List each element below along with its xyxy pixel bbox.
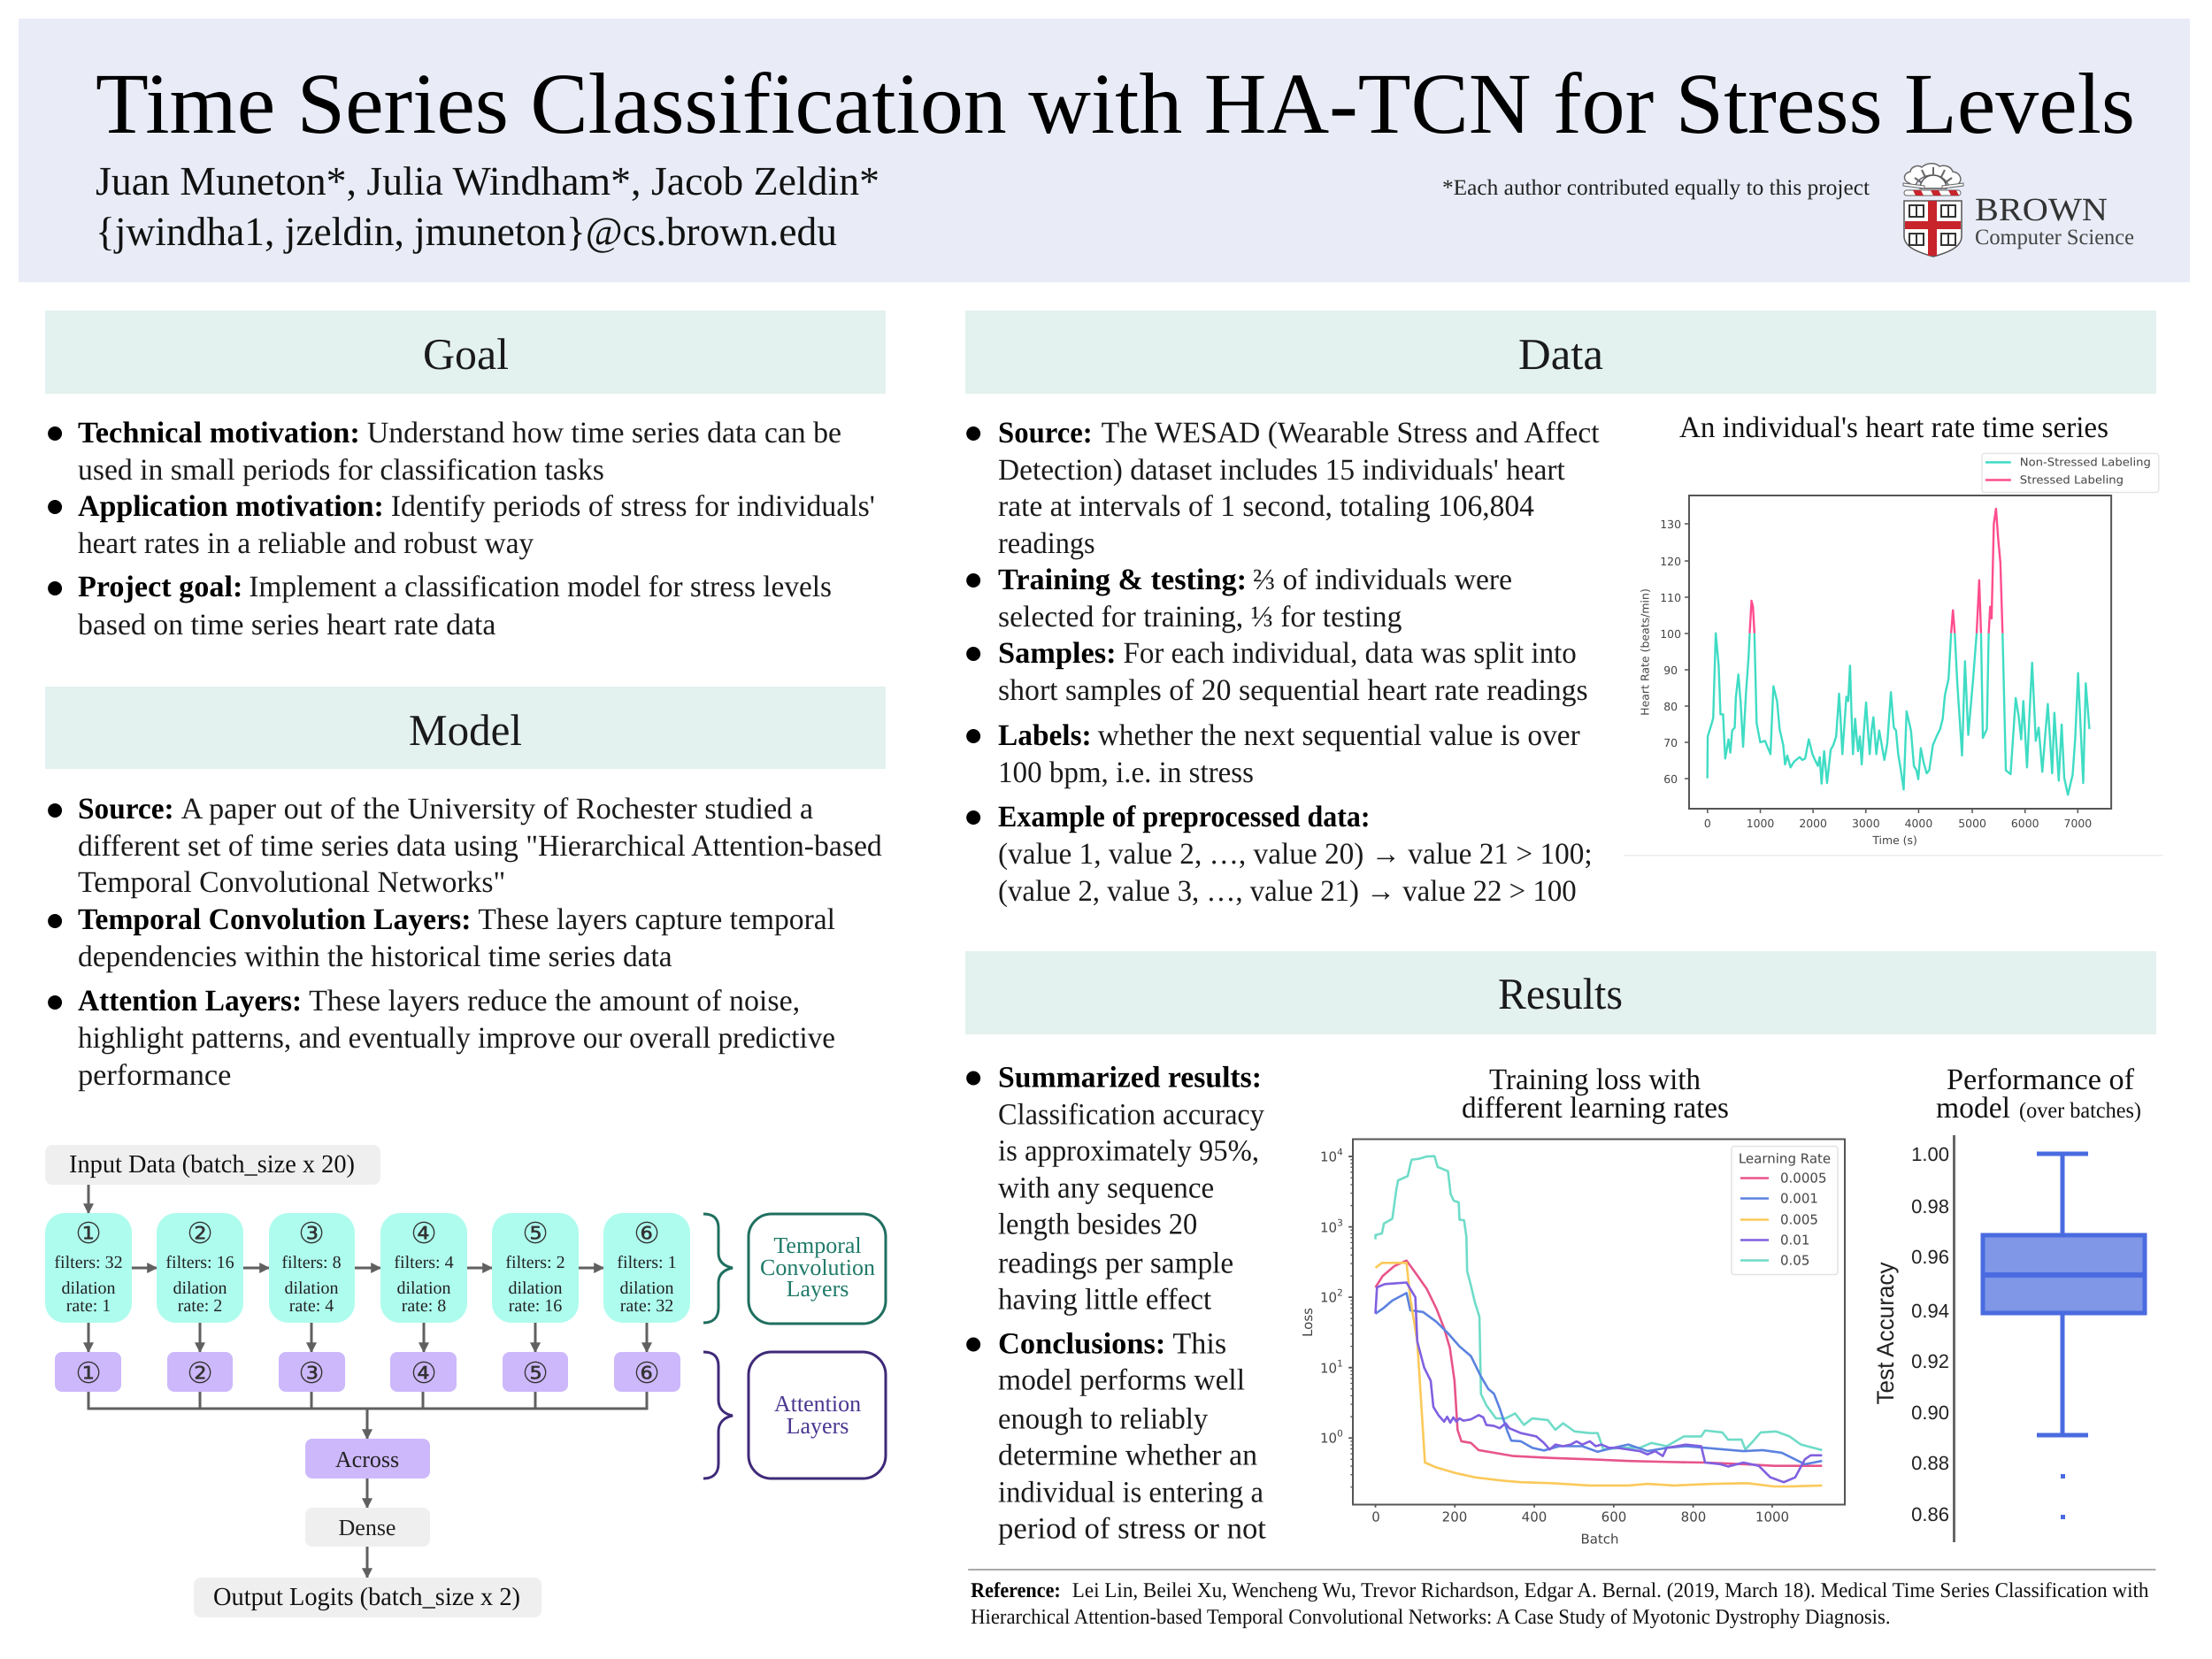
results bullet list: Conclusions: <box>998 1327 1165 1361</box>
training loss axis labels: 2 <box>1337 1288 1343 1299</box>
temporal convolution layer blocks: rate: 4 <box>289 1296 334 1316</box>
box plot tick labels: 0.86 <box>1911 1503 1949 1525</box>
attention layer blocks: ④ <box>411 1358 437 1390</box>
label: temporal convolution layers: Convolution <box>760 1255 875 1280</box>
heart rate legend <box>1982 453 2159 492</box>
results bullet list: readings per sample <box>998 1248 1233 1279</box>
goal bullet list: Identify periods of stress for individuals' <box>391 490 875 523</box>
temporal convolution layer blocks: filters: 16 <box>165 1253 234 1272</box>
dense block <box>305 1508 430 1547</box>
heading: data <box>965 311 2156 394</box>
temporal convolution layer blocks: ⑤ <box>522 1218 549 1250</box>
temporal convolution layer blocks: filters: 32 <box>54 1253 123 1272</box>
brace: temporal convolution layers <box>703 1214 733 1323</box>
reference citation: Lei Lin, Beilei Xu, Wencheng Wu, Trevor Richardson, Edgar A. Bernal. (2019, March 18). Medical Time Series Classification with <box>1072 1579 2148 1602</box>
output logits box <box>194 1578 541 1617</box>
box plot tick labels: 0.96 <box>1911 1246 1949 1268</box>
training loss axis labels: 0 <box>1337 1428 1343 1439</box>
data bullet list: For each individual, data was split into <box>1124 637 1577 670</box>
training loss axis labels: 10 <box>1320 1219 1337 1235</box>
temporal convolution layer blocks: filters: 1 <box>617 1253 677 1272</box>
results bullet list: with any sequence <box>998 1171 1214 1205</box>
heart rate axis labels: 1000 <box>1747 817 1774 830</box>
heart rate axis labels: 90 <box>1663 664 1678 677</box>
logo: Brown Computer Science <box>1903 164 2134 257</box>
model architecture diagram <box>45 1145 886 1617</box>
results bullet list: determine whether an <box>998 1439 1257 1472</box>
label: attention layers <box>749 1352 886 1479</box>
temporal convolution layer blocks: ① <box>75 1218 102 1250</box>
heart rate axis labels: Time (s) <box>1871 833 1917 847</box>
attention layer blocks: ① <box>75 1358 102 1390</box>
results bullet list: model performs well <box>998 1364 1245 1396</box>
chart title: training loss: different learning rates <box>1462 1092 1729 1125</box>
chart title: training loss <box>1462 1064 1729 1125</box>
model bullet list: A paper out of the University of Rochester studied a <box>181 793 813 826</box>
attention layer blocks: ② <box>187 1358 213 1390</box>
author emails: {jwindha1, jzeldin, jmuneton}@cs.brown.edu <box>96 209 837 254</box>
box plot tick labels: 1.00 <box>1911 1143 1949 1165</box>
temporal convolution layer blocks: ② <box>187 1218 213 1250</box>
goal bullet list: Technical motivation: <box>78 417 360 449</box>
results bullet list <box>966 1062 1267 1545</box>
chart title: performance of model: model <box>1936 1092 2010 1125</box>
temporal convolution layer blocks: filters: 2 <box>505 1253 565 1272</box>
model bullet list: Temporal Convolution Layers: <box>78 903 471 936</box>
heart rate axis labels: 130 <box>1660 518 1681 531</box>
chart title: heart rate: An individual's heart rate time series <box>1679 411 2108 444</box>
results bullet list: period of stress or not <box>998 1513 1267 1545</box>
temporal convolution layer blocks: dilation <box>284 1279 339 1298</box>
goal bullet list: Implement a classification model for stress levels <box>249 571 832 603</box>
goal bullet list: Understand how time series data can be <box>367 417 841 449</box>
temporal convolution layer blocks <box>45 1213 690 1323</box>
model bullet list <box>48 793 882 1092</box>
data bullet list: rate at intervals of 1 second, totaling 106,804 <box>998 490 1534 523</box>
temporal convolution layer blocks: dilation <box>173 1279 227 1298</box>
chart title: training loss: Training loss with <box>1489 1064 1701 1096</box>
box plot axis title: Test Accuracy <box>1872 1262 1899 1405</box>
title: Time Series Classification with HA-TCN for Stress Levels <box>96 57 2135 152</box>
label: temporal convolution layers: Layers <box>787 1276 849 1302</box>
heart rate axis labels: Heart Rate (beats/min) <box>1638 588 1651 716</box>
box plot: test accuracy <box>1872 1135 2147 1542</box>
heading: model: Model <box>409 705 522 755</box>
logo: Brown Computer Science: Computer Science <box>1975 226 2134 250</box>
training loss legend: 0.01 <box>1780 1232 1809 1248</box>
training loss axis labels: 10 <box>1320 1148 1337 1164</box>
data bullet list: Samples: <box>998 637 1117 670</box>
box plot tick labels: 0.98 <box>1911 1195 1949 1217</box>
temporal convolution layer blocks: ⑥ <box>634 1218 660 1250</box>
model bullet list: performance <box>78 1059 231 1092</box>
temporal convolution layer blocks: ④ <box>411 1218 437 1250</box>
chart title: performance of model <box>1936 1064 2141 1125</box>
heart rate axis labels: 4000 <box>1905 817 1932 830</box>
results bullet list: is approximately 95%, <box>998 1134 1259 1168</box>
line chart: heart rate time series <box>1638 453 2159 847</box>
heading: results <box>965 951 2156 1034</box>
data bullet list: Detection) dataset includes 15 individuals' heart <box>998 454 1565 487</box>
results bullet list: This <box>1172 1327 1226 1361</box>
goal bullet list <box>48 417 875 641</box>
brace: attention layers <box>703 1352 733 1479</box>
box plot tick labels <box>1911 1143 1949 1525</box>
results bullet list: enough to reliably <box>998 1403 1208 1435</box>
heart rate axis labels: 100 <box>1660 627 1681 641</box>
reference citation: Hierarchical Attention-based Temporal Convolutional Networks: A Case Study of Myotonic Dystrophy Diagnosis. <box>971 1606 1890 1629</box>
chart title: performance of model: (over batches) <box>2019 1099 2141 1123</box>
data bullet list: selected for training, ⅓ for testing <box>998 601 1402 634</box>
model bullet list: These layers reduce the amount of noise, <box>309 985 800 1018</box>
input data box <box>45 1145 380 1185</box>
results bullet list: individual is entering a <box>998 1476 1263 1509</box>
reference citation <box>968 1569 2155 1629</box>
output logits box: Output Logits (batch_size x 2) <box>213 1583 520 1611</box>
goal bullet list: Project goal: <box>78 571 242 603</box>
temporal convolution layer blocks: rate: 16 <box>509 1296 562 1316</box>
training loss axis labels: 200 <box>1442 1509 1467 1525</box>
model bullet list: Source: <box>78 793 174 826</box>
panel: model <box>45 687 886 1092</box>
training loss legend <box>1732 1147 1838 1274</box>
heart rate legend: Stressed Labeling <box>2020 472 2124 487</box>
reference citation: Reference: <box>971 1579 1061 1602</box>
temporal convolution layer blocks: rate: 32 <box>620 1296 673 1316</box>
heart rate axis labels: 2000 <box>1799 817 1827 830</box>
box plot tick labels: 0.88 <box>1911 1452 1949 1474</box>
training loss axis labels: 10 <box>1320 1361 1337 1377</box>
training loss axis labels: Loss <box>1300 1308 1316 1337</box>
line chart: training loss <box>1300 1140 1845 1547</box>
temporal convolution layer blocks: ③ <box>298 1218 325 1250</box>
data bullet list <box>966 417 1600 908</box>
input data box: Input Data (batch_size x 20) <box>69 1150 355 1179</box>
heart rate axis labels: 80 <box>1663 700 1678 713</box>
heart rate legend: Non-Stressed Labeling <box>2020 455 2151 469</box>
data bullet list: ⅔ of individuals were <box>1253 564 1512 596</box>
data bullet list: readings <box>998 527 1095 560</box>
box plot tick labels: 0.90 <box>1911 1402 1949 1424</box>
training loss axis labels: 800 <box>1681 1509 1706 1525</box>
model bullet list: dependencies within the historical time series data <box>78 941 672 973</box>
heart rate axis labels: 70 <box>1663 736 1678 749</box>
authors: Juan Muneton*, Julia Windham*, Jacob Zeldin* <box>96 158 879 204</box>
data bullet list: The WESAD (Wearable Stress and Affect <box>1102 417 1600 449</box>
data bullet list: Source: <box>998 417 1093 449</box>
label: attention layers: Attention <box>774 1391 861 1417</box>
chart title: performance of model: Performance of <box>1947 1064 2135 1096</box>
header banner <box>19 19 2190 282</box>
training loss axis labels: 600 <box>1601 1509 1626 1525</box>
results bullet list: Summarized results: <box>998 1062 1262 1094</box>
heart rate axis labels <box>1638 518 2092 847</box>
panel: results <box>965 951 2156 1547</box>
goal bullet list: used in small periods for classification tasks <box>78 454 604 487</box>
model bullet list: These layers capture temporal <box>478 903 835 936</box>
logo: Brown Computer Science: BROWN <box>1975 192 2108 228</box>
training loss legend: 0.05 <box>1780 1253 1809 1269</box>
temporal convolution layer blocks: dilation <box>508 1279 563 1298</box>
heading: data: Data <box>1518 329 1603 379</box>
goal bullet list: based on time series heart rate data <box>78 609 495 641</box>
box plot tick labels: 0.92 <box>1911 1350 1949 1372</box>
heart rate axis labels: 5000 <box>1958 817 1986 830</box>
attention layer blocks: ③ <box>298 1358 325 1390</box>
heart rate axis labels: 3000 <box>1852 817 1880 830</box>
dense block: Dense <box>339 1515 396 1540</box>
panel: goal <box>45 311 886 641</box>
results bullet list: having little effect <box>998 1283 1212 1317</box>
heart rate axis labels: 7000 <box>2064 817 2092 830</box>
model bullet list: different set of time series data using "Hierarchical Attention-based <box>78 830 882 863</box>
panel: data <box>965 311 2163 908</box>
heart rate axis labels: 110 <box>1660 591 1681 604</box>
data bullet list: (value 1, value 2, …, value 20) → value 21 > 100; <box>998 838 1593 871</box>
heart rate axis labels: 0 <box>1704 817 1711 830</box>
label: attention layers: Layers <box>787 1413 849 1439</box>
training loss axis labels: Batch <box>1580 1531 1619 1547</box>
model bullet list: Temporal Convolutional Networks" <box>78 866 505 899</box>
heading: goal <box>45 311 886 394</box>
data bullet list: (value 2, value 3, …, value 21) → value 22 > 100 <box>998 875 1577 908</box>
training loss legend: Learning Rate <box>1739 1150 1831 1166</box>
temporal convolution layer blocks: rate: 8 <box>402 1296 446 1316</box>
training loss axis labels: 1000 <box>1755 1509 1789 1525</box>
attention layer blocks <box>55 1352 680 1392</box>
attention layer blocks: ⑤ <box>522 1358 549 1390</box>
heading: model <box>45 687 886 769</box>
temporal convolution layer blocks: filters: 4 <box>394 1253 454 1272</box>
data bullet list: Labels: <box>998 719 1092 752</box>
temporal convolution layer blocks: rate: 1 <box>66 1296 111 1316</box>
model bullet list: Attention Layers: <box>78 985 302 1018</box>
temporal convolution layer blocks: filters: 8 <box>281 1253 342 1272</box>
data bullet list: Training & testing: <box>998 564 1247 596</box>
training loss axis labels: 10 <box>1320 1430 1337 1446</box>
heart rate axis labels: 6000 <box>2011 817 2039 830</box>
training loss axis labels: 4 <box>1337 1147 1343 1157</box>
arrows between layers <box>88 1185 647 1578</box>
training loss axis labels: 1 <box>1337 1359 1343 1370</box>
goal bullet list: heart rates in a reliable and robust way <box>78 527 534 560</box>
training loss legend: 0.0005 <box>1780 1170 1826 1186</box>
across block: Across <box>335 1447 399 1472</box>
results bullet list: length besides 20 <box>998 1209 1197 1240</box>
heading: results: Results <box>1498 969 1623 1018</box>
equal contribution note: *Each author contributed equally to this project <box>1442 176 1870 200</box>
data bullet list: Example of preprocessed data: <box>998 801 1371 833</box>
training loss legend: 0.001 <box>1780 1191 1818 1207</box>
results bullet list: Classification accuracy <box>998 1099 1264 1131</box>
data bullet list: whether the next sequential value is over <box>1098 719 1580 752</box>
across block <box>305 1439 430 1479</box>
training loss axis labels: 10 <box>1320 1290 1337 1306</box>
data bullet list: 100 bpm, i.e. in stress <box>998 757 1254 789</box>
training loss legend: 0.005 <box>1780 1212 1818 1228</box>
training loss axis labels <box>1300 1147 1789 1547</box>
attention layer blocks: ⑥ <box>634 1358 660 1390</box>
temporal convolution layer blocks: dilation <box>61 1279 116 1298</box>
goal bullet list: Application motivation: <box>78 490 384 523</box>
model bullet list: highlight patterns, and eventually improve our overall predictive <box>78 1022 835 1055</box>
training loss axis labels: 0 <box>1371 1509 1380 1525</box>
box plot tick labels: 0.94 <box>1911 1300 1949 1322</box>
temporal convolution layer blocks: dilation <box>396 1279 451 1298</box>
heart rate axis labels: 60 <box>1663 772 1678 786</box>
temporal convolution layer blocks: dilation <box>619 1279 674 1298</box>
label: temporal convolution layers <box>749 1214 886 1324</box>
training loss axis labels: 400 <box>1522 1509 1547 1525</box>
heart rate axis labels: 120 <box>1660 555 1681 568</box>
temporal convolution layer blocks: rate: 2 <box>178 1296 222 1316</box>
heading: goal: Goal <box>423 329 509 379</box>
training loss axis labels: 3 <box>1337 1217 1343 1228</box>
data bullet list: short samples of 20 sequential heart rate readings <box>998 674 1588 707</box>
label: temporal convolution layers: Temporal <box>773 1233 862 1258</box>
